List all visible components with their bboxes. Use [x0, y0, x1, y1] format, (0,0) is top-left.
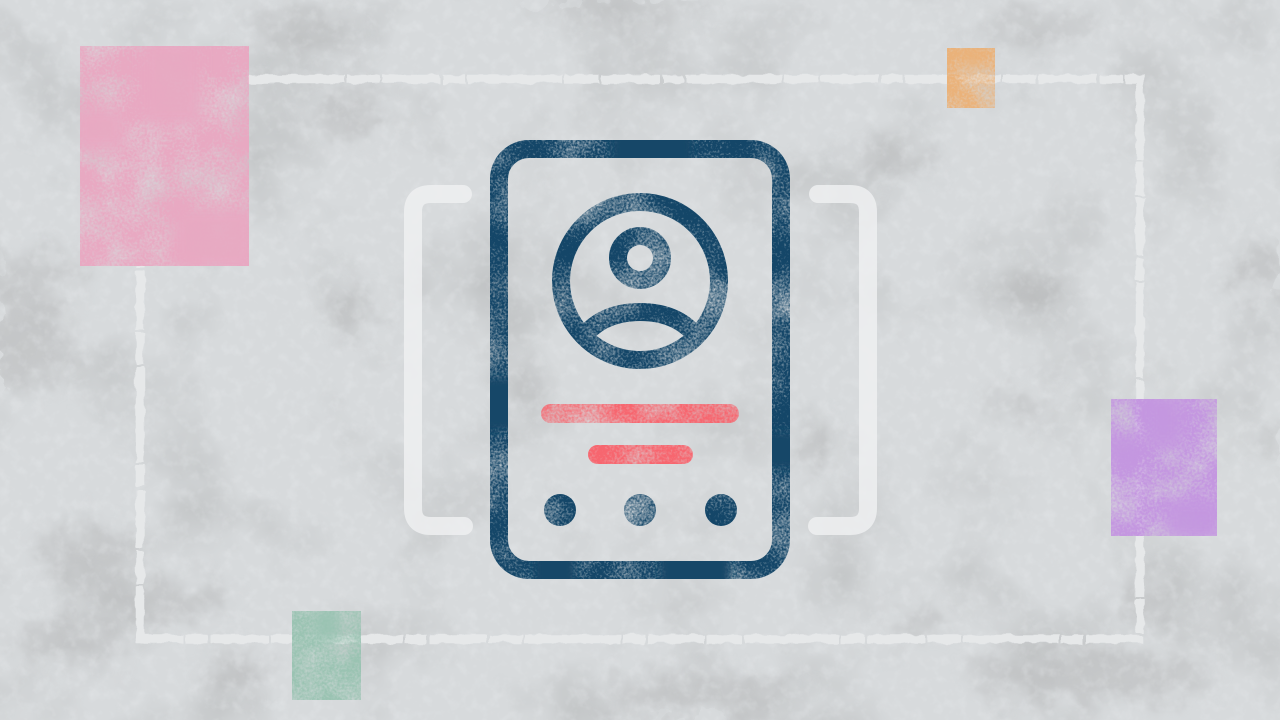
subtitle bar [588, 445, 693, 464]
purple rectangle [1111, 399, 1217, 536]
left bracket [413, 194, 464, 526]
profile card [490, 140, 790, 579]
avatar shoulders [581, 312, 699, 340]
pink rectangle [75, 40, 254, 270]
dashed white frame [140, 79, 1140, 639]
right bracket [817, 194, 868, 526]
avatar circle [561, 202, 719, 360]
solid ink patches on card edge [490, 140, 790, 579]
avatar head [618, 236, 662, 280]
name bar [541, 404, 739, 423]
middle dot [624, 494, 656, 526]
worn blue artwork [499, 149, 781, 570]
orange rectangle [947, 44, 995, 108]
left dot [544, 494, 576, 526]
card outline [499, 149, 781, 570]
green rectangle [292, 607, 361, 700]
right dot [705, 494, 737, 526]
